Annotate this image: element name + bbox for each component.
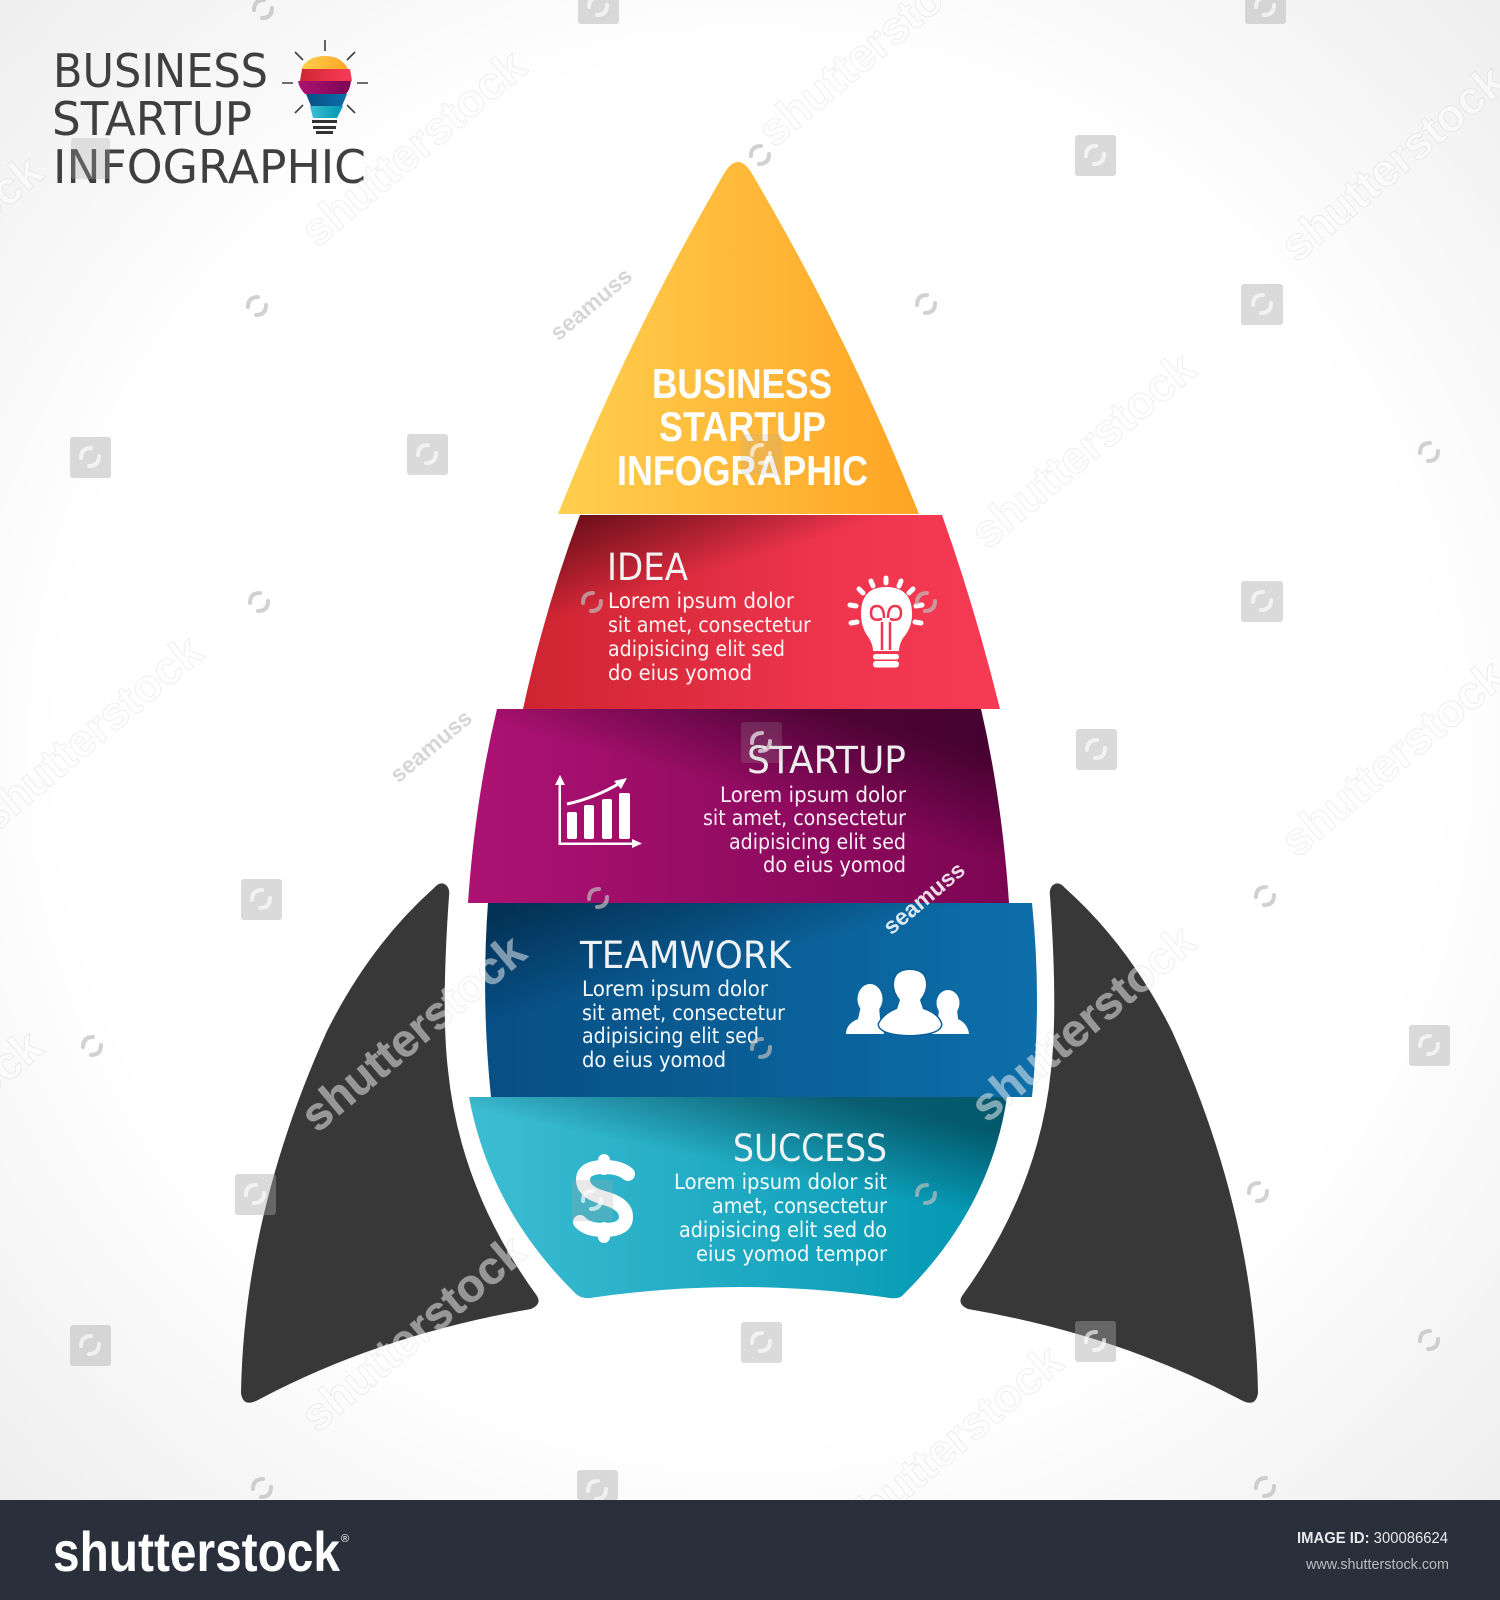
panel: teal success bbox=[469, 1097, 1007, 1298]
startup text: Lorem ipsum dolor bbox=[720, 783, 906, 808]
watermark: stock photo overlay: shutterstock bbox=[290, 1224, 535, 1441]
icon: dollar bbox=[580, 1160, 628, 1237]
success text: eius yomod tempor bbox=[696, 1242, 887, 1267]
idea text: Lorem ipsum dolor bbox=[608, 589, 794, 614]
icon: light bulb bbox=[850, 578, 922, 668]
watermark: stock photo overlay: shutterstock bbox=[290, 39, 535, 256]
success text: adipisicing elit sed do bbox=[679, 1218, 887, 1243]
startup text: adipisicing elit sed bbox=[729, 830, 906, 855]
teamwork text: Lorem ipsum dolor bbox=[582, 977, 768, 1002]
title: STARTUP bbox=[52, 92, 252, 146]
right fin bbox=[960, 883, 1258, 1403]
startup text bbox=[703, 783, 906, 878]
nose heading: INFOGRAPHIC bbox=[617, 447, 868, 494]
watermark: stock photo overlay: shutterstock bbox=[290, 924, 535, 1141]
nose heading: BUSINESS bbox=[652, 360, 832, 407]
icon: team bbox=[846, 970, 969, 1035]
idea text: do eius yomod bbox=[608, 661, 752, 686]
idea heading: IDEA bbox=[607, 546, 688, 589]
footer logo: shutterstock bbox=[53, 1520, 341, 1583]
teamwork text: sit amet, consectetur bbox=[582, 1001, 785, 1026]
teamwork text: adipisicing elit sed bbox=[582, 1024, 759, 1049]
watermark: stock photo overlay: shutterstock bbox=[960, 341, 1205, 558]
watermark: stock photo overlay: shutterstock bbox=[827, 1334, 1072, 1551]
idea text: sit amet, consectetur bbox=[608, 613, 811, 638]
panel: nose cone bbox=[558, 162, 919, 514]
idea text bbox=[608, 589, 811, 686]
nose heading bbox=[617, 360, 868, 494]
startup text: sit amet, consectetur bbox=[703, 806, 906, 831]
icon: bar chart bbox=[555, 775, 642, 848]
teamwork text: do eius yomod bbox=[582, 1048, 726, 1073]
success text: Lorem ipsum dolor sit bbox=[674, 1170, 887, 1195]
footer logo registered mark: ® bbox=[341, 1533, 349, 1545]
teamwork text bbox=[582, 977, 785, 1073]
footer bar bbox=[0, 1500, 1500, 1600]
watermark: stock photo overlay: seamuss bbox=[385, 704, 477, 787]
title bbox=[52, 44, 366, 194]
watermark: stock photo overlay: shutterstock bbox=[960, 914, 1205, 1131]
startup heading: STARTUP bbox=[747, 739, 906, 782]
idea text: adipisicing elit sed bbox=[608, 637, 785, 662]
panel: blue teamwork bbox=[485, 903, 1037, 1097]
title: INFOGRAPHIC bbox=[53, 140, 366, 194]
startup text: do eius yomod bbox=[763, 853, 906, 878]
icon: small multicolour light bulb bbox=[282, 40, 368, 134]
success text: amet, consectetur bbox=[712, 1194, 887, 1219]
watermark: stock photo overlay: seamuss bbox=[545, 262, 637, 345]
panel: red idea bbox=[523, 515, 1000, 709]
left fin bbox=[241, 883, 539, 1403]
footer url: www.shutterstock.com bbox=[1305, 1556, 1449, 1573]
success text bbox=[674, 1170, 887, 1267]
panel: purple startup bbox=[468, 709, 1009, 903]
watermark: stock photo overlay: seamuss bbox=[878, 856, 970, 939]
success heading: SUCCESS bbox=[733, 1127, 887, 1170]
footer image id: IMAGE ID: 300086624 bbox=[1297, 1530, 1448, 1547]
title: BUSINESS bbox=[53, 44, 268, 98]
teamwork heading: TEAMWORK bbox=[579, 934, 793, 977]
nose heading: STARTUP bbox=[659, 403, 826, 450]
